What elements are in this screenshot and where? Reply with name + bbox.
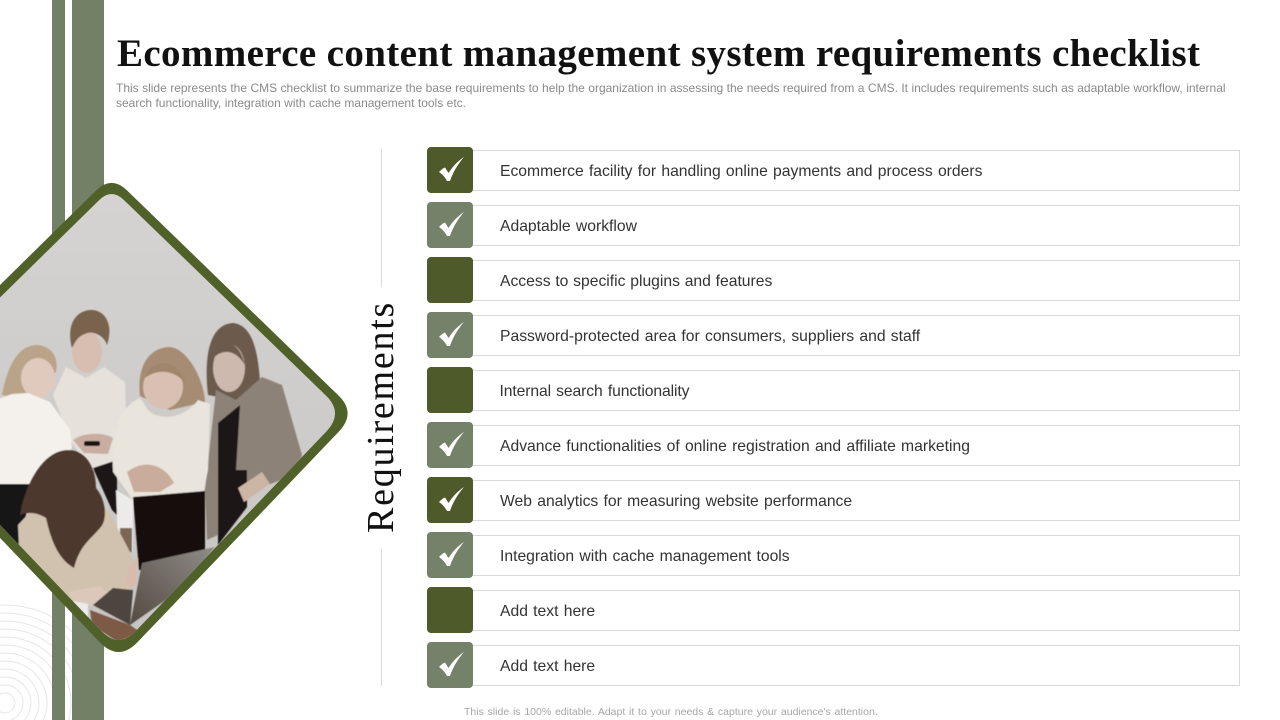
checklist row 6: Advance functionalities of online registration and affiliate marketing [500, 438, 970, 455]
checklist row 10: Add text here [500, 658, 595, 675]
checklist row 5: Internal search functionality [500, 383, 689, 400]
vertical heading: Requirements: Requirements [360, 301, 402, 533]
subtitle description [116, 81, 1226, 110]
subtitle description: search functionality, integration with cache management tools etc. [116, 96, 466, 110]
checklist row 3 [427, 257, 1240, 303]
diamond frame border [0, 183, 348, 652]
checklist row 4 [427, 312, 1240, 358]
checklist row 2 [427, 202, 1240, 248]
photo in diamond frame [0, 182, 348, 652]
checklist row 5 [427, 367, 1240, 413]
checklist row 2: Adaptable workflow [500, 218, 637, 235]
checklist row 8: Integration with cache management tools [500, 548, 790, 565]
title: Ecommerce content management system requirements checklist [117, 32, 1200, 75]
checklist row 8 [427, 532, 1240, 578]
checklist row 7 [427, 477, 1240, 523]
checklist row 3: Access to specific plugins and features [500, 273, 772, 290]
woman left [2, 345, 57, 400]
checklist row 6 [427, 422, 1240, 468]
table and laptop [90, 610, 140, 642]
woman right [207, 323, 260, 400]
checklist row 7: Web analytics for measuring website performance [500, 493, 852, 510]
decorative left vertical bars [52, 0, 104, 720]
vertical divider top [381, 149, 382, 287]
man hands with phone [73, 434, 113, 454]
checklist row 4: Password-protected area for consumers, suppliers and staff [500, 328, 920, 345]
checklist row 9: Add text here [500, 603, 595, 620]
woman middle [139, 347, 205, 410]
man back [53, 367, 127, 470]
vertical divider bottom [381, 549, 382, 686]
checklist row 9 [427, 587, 1240, 633]
checklist row 10 [427, 642, 1240, 688]
checklist row 1 [427, 147, 1240, 193]
concentric circle pattern [0, 604, 72, 720]
footer note: This slide is 100% editable. Adapt it to your needs & capture your audience's attention. [464, 706, 878, 718]
subtitle description: This slide represents the CMS checklist to summarize the base requirements to help the organization in assessing the needs required from a CMS. It includes requirements such as adaptable workflow, internal [116, 81, 1226, 95]
checklist row 1: Ecommerce facility for handling online payments and process orders [500, 163, 982, 180]
group photo [0, 194, 335, 640]
seated woman [18, 510, 138, 600]
